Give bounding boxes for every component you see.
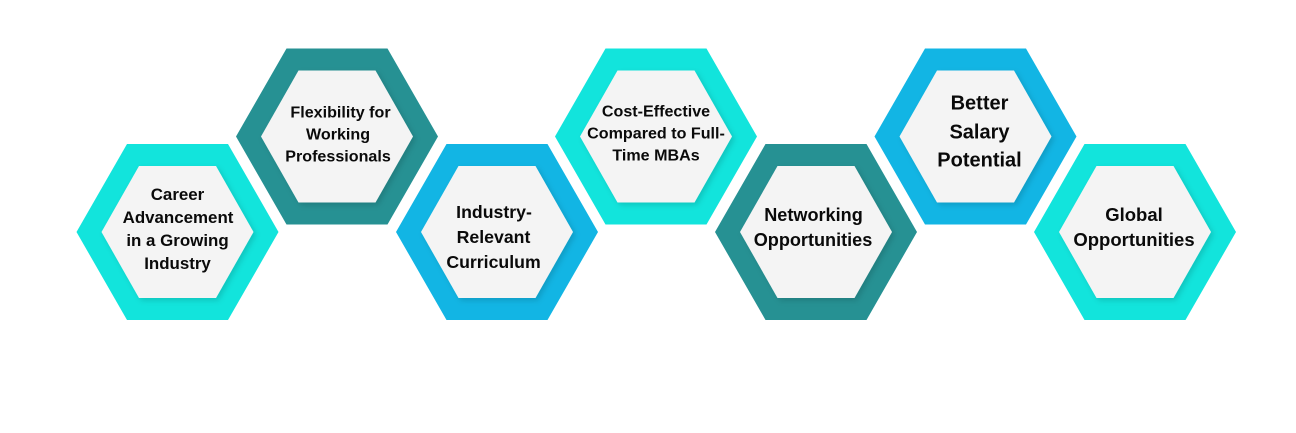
hexagon: Career Advancement [76,144,278,320]
label: Flexibility: Professionals [285,148,391,166]
hexagon: Global Opportunities [1034,144,1236,320]
label: Networking Opportunities: Opportunities [754,230,872,250]
label: Career Advancement: in a Growing [126,231,229,250]
label: Global Opportunities: Opportunities [1073,229,1195,250]
label: Better Salary Potential: Better [951,92,1009,114]
label: Cost-Effective: Time MBAs [612,146,700,164]
label: Industry-Relevant Curriculum: Industry- [456,202,532,222]
hexagon: Cost-Effective [555,48,757,224]
hexagon: Industry-Relevant Curriculum [396,144,598,320]
hexagon: Networking Opportunities [715,144,917,320]
label: Global Opportunities: Global [1105,204,1163,225]
label: Industry-Relevant Curriculum: Curriculum [446,252,541,272]
label: Career Advancement: Industry [144,254,211,273]
label: Career Advancement: Advancement [123,208,234,227]
label: Better Salary Potential: Potential [937,150,1022,172]
label: Career Advancement: Career [151,185,205,204]
label: Flexibility: Flexibility for [290,104,391,122]
label: Better Salary Potential: Salary [949,122,1010,144]
label: Flexibility: Working [306,126,370,144]
label: Cost-Effective: Compared to Full- [587,124,725,142]
hexagon: Better Salary Potential [874,48,1076,224]
label: Networking Opportunities: Networking [764,205,863,225]
label: Industry-Relevant Curriculum: Relevant [457,227,530,247]
hexagon: Flexibility [236,48,438,224]
label: Cost-Effective: Cost-Effective [602,102,710,120]
